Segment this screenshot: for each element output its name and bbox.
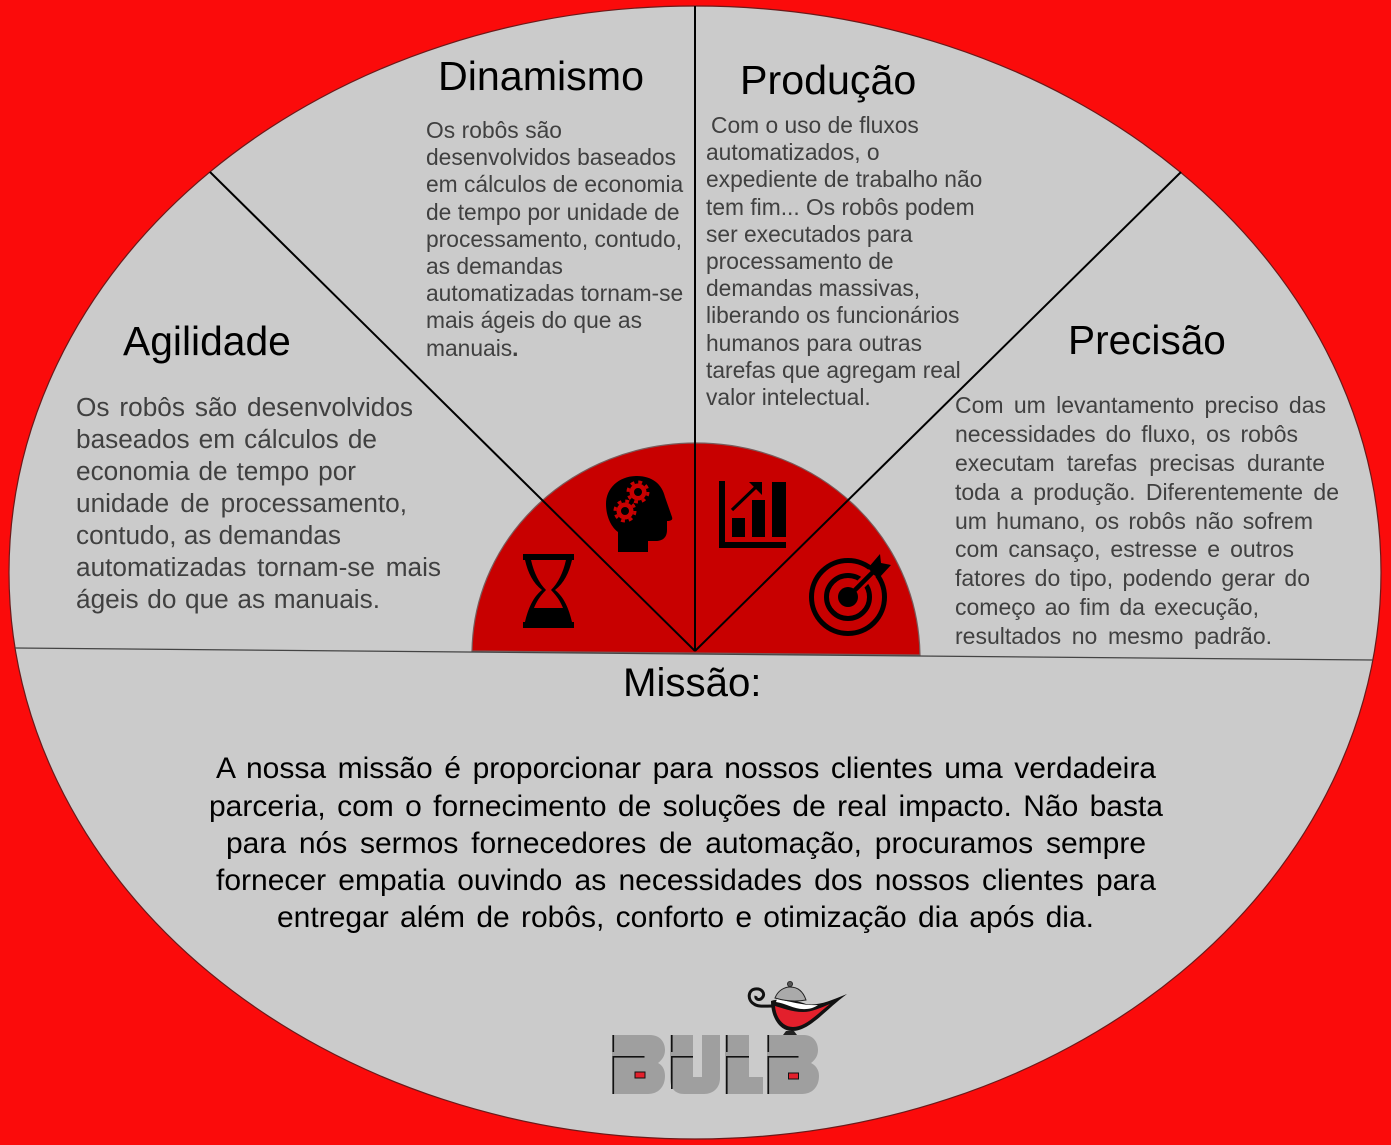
text: A nossa missão é proporcionar para nossos clientes uma verdadeira <box>216 752 1156 785</box>
text: executam tarefas precisas durante <box>955 450 1325 476</box>
text: Com o uso de fluxos <box>711 112 919 138</box>
letters <box>612 1035 819 1094</box>
text: necessidades do fluxo, os robôs <box>955 421 1298 447</box>
text: fatores do tipo, podendo gerar do <box>955 565 1310 591</box>
text: fornecer empatia ouvindo as necessidades dos nossos clientes para <box>216 864 1156 897</box>
text: liberando os funcionários <box>706 302 959 328</box>
text: resultados no mesmo padrão. <box>955 623 1272 649</box>
text: toda a produção. Diferentemente de <box>955 479 1339 505</box>
logo red squares <box>635 1072 798 1079</box>
red central semicircle <box>472 443 920 655</box>
text: automatizados, o <box>706 139 880 165</box>
text: manuais. <box>426 335 519 361</box>
text: Agilidade <box>76 392 441 614</box>
text: automatizadas tornam-se <box>426 280 683 306</box>
text: tarefas que agregam real <box>706 357 961 383</box>
text: mission <box>209 752 1163 934</box>
text: ser executados para <box>706 221 913 247</box>
text: Com um levantamento preciso das <box>955 392 1326 418</box>
text: processamento de <box>706 248 894 274</box>
title: Produção: Produção <box>740 57 916 103</box>
text: expediente de trabalho não <box>706 166 982 192</box>
text: as demandas <box>426 253 563 279</box>
title: Precisão: Precisão <box>1068 317 1226 363</box>
text: humanos para outras <box>706 330 922 356</box>
title: Missão: Missão: <box>623 660 761 705</box>
logo: BULB lamp <box>612 981 847 1094</box>
text: Os robôs são <box>426 117 562 143</box>
text: Dinamismo <box>426 117 684 361</box>
text: começo ao fim da execução, <box>955 594 1259 620</box>
text: economia de tempo por <box>76 456 356 486</box>
text: Produção <box>706 112 982 410</box>
text: de tempo por unidade de <box>426 199 680 225</box>
text: automatizadas tornam-se mais <box>76 552 441 582</box>
text: um humano, os robôs não sofrem <box>955 508 1313 534</box>
text: ágeis do que as manuais. <box>76 584 380 614</box>
text: baseados em cálculos de <box>76 424 377 454</box>
text: demandas massivas, <box>706 275 920 301</box>
text: para nós sermos fornecedores de automação, procuramos sempre <box>226 827 1146 860</box>
text: valor intelectual. <box>706 384 871 410</box>
text: Os robôs são desenvolvidos <box>76 392 413 422</box>
letter cuts <box>612 1035 798 1094</box>
text: Precisão <box>955 392 1339 649</box>
text: entregar além de robôs, conforto e otimização dia após dia. <box>277 901 1094 934</box>
lamp <box>749 981 847 1035</box>
text: em cálculos de economia <box>426 171 683 197</box>
title: Dinamismo: Dinamismo <box>438 53 644 99</box>
icon: hourglass <box>523 554 574 628</box>
text: contudo, as demandas <box>76 520 341 550</box>
text: processamento, contudo, <box>426 226 682 252</box>
text: tem fim... Os robôs podem <box>706 194 975 220</box>
text: com cansaço, estresse e outros <box>955 536 1294 562</box>
icon: bar chart with arrow <box>719 481 786 548</box>
text: unidade de processamento, <box>76 488 407 518</box>
title: Agilidade: Agilidade <box>123 318 291 364</box>
text: desenvolvidos baseados <box>426 144 676 170</box>
text: parceria, com o fornecimento de soluções de real impacto. Não basta <box>209 790 1163 823</box>
icon: head with gears <box>606 476 672 552</box>
icon: target with arrow <box>812 554 891 634</box>
text: mais ágeis do que as <box>426 307 642 333</box>
